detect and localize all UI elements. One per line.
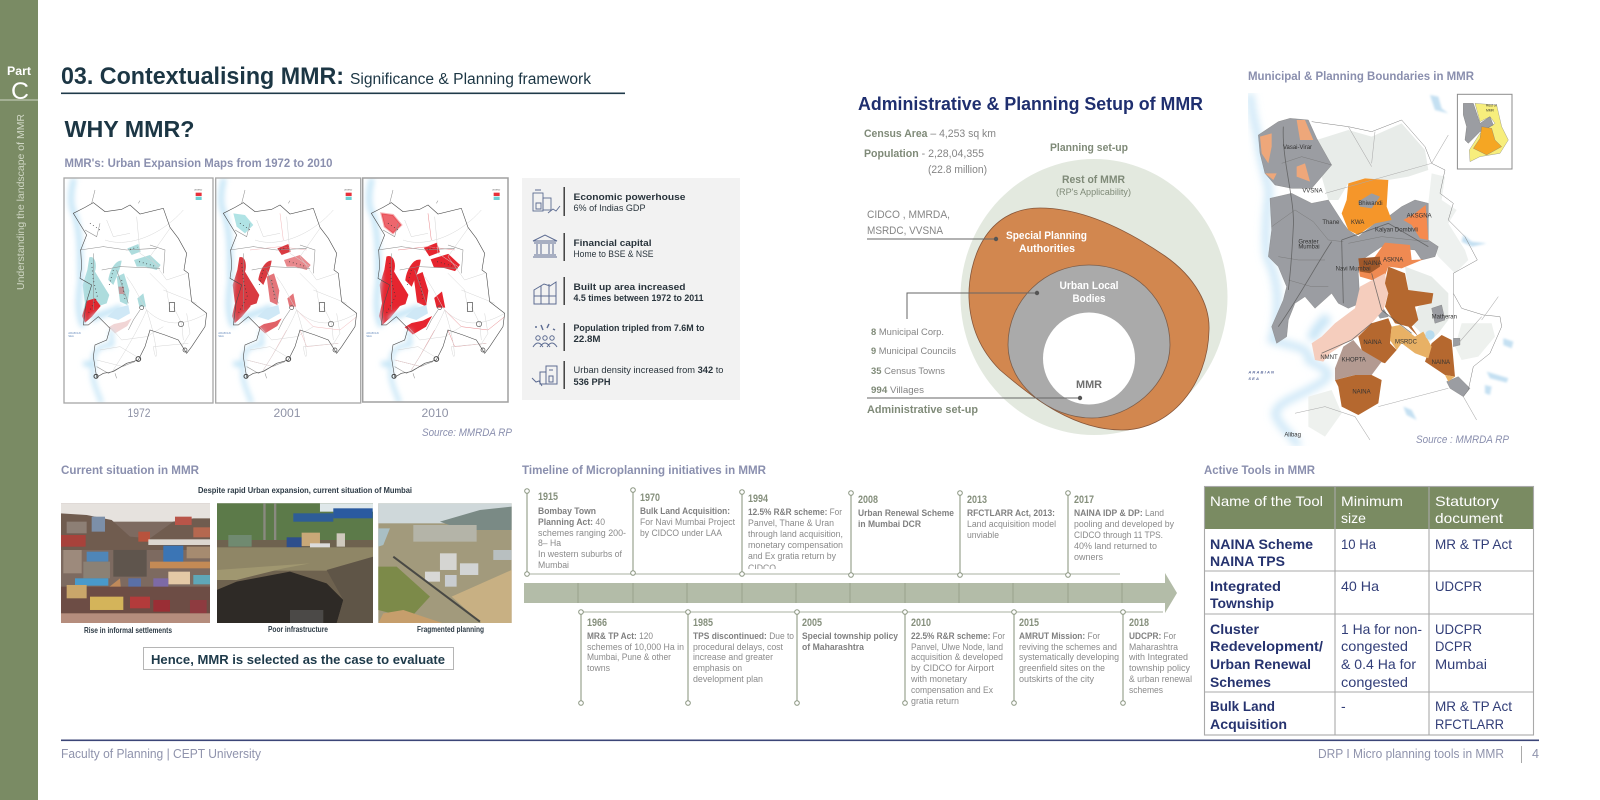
event 2018 bbox=[1128, 617, 1192, 695]
row: NAINA scheme: MR & TP Act bbox=[1435, 536, 1512, 552]
fact: built up area: 4.5 times between 1972 to 2011 bbox=[574, 293, 704, 304]
photo captions: Rise in informal settlements bbox=[84, 626, 172, 635]
row: cluster redevelopment: Urban Renewal bbox=[1210, 656, 1311, 672]
label: urban local bodies: Bodies bbox=[1072, 293, 1106, 305]
map place labels: Thane bbox=[1322, 220, 1340, 226]
row: cluster redevelopment: Redevelopment/ bbox=[1210, 638, 1323, 654]
row: integrated township: Township bbox=[1210, 595, 1274, 611]
arabian sea label: SEA bbox=[1248, 376, 1260, 381]
arabian sea label: ARABIAN bbox=[1247, 369, 1275, 374]
table header: Minimum bbox=[1341, 493, 1403, 509]
event 1966: schemes of 10,000 Ha in bbox=[587, 642, 684, 652]
page title bbox=[61, 63, 625, 94]
event 1915: 1915 bbox=[538, 491, 558, 503]
label: rest of MMR: Rest of MMR bbox=[1062, 174, 1125, 186]
map place labels bbox=[1283, 145, 1457, 439]
event 2018: with Integrated bbox=[1128, 652, 1188, 662]
event 1985: procedural delays, cost bbox=[693, 642, 783, 652]
fact: urban density: 536 PPH bbox=[574, 377, 611, 388]
event 2017: NAINA IDP & DP: Land bbox=[1074, 508, 1164, 518]
panel: urban expansion maps bbox=[64, 178, 513, 439]
row: bulk land acquisition bbox=[1210, 698, 1512, 732]
row: cluster redevelopment: & 0.4 Ha for bbox=[1341, 656, 1416, 672]
table: active tools in MMR bbox=[1204, 486, 1534, 735]
event 1966: towns bbox=[587, 663, 610, 673]
sidebar: part marker bbox=[0, 0, 38, 800]
event 2017: pooling and developed by bbox=[1074, 519, 1174, 529]
event 1915: schemes ranging 200- bbox=[538, 528, 626, 538]
label: special planning authorities: Authorities bbox=[1019, 243, 1075, 255]
row: NAINA scheme: NAINA Scheme bbox=[1210, 536, 1313, 552]
event 1985: emphasis on bbox=[693, 663, 742, 673]
label: MMR core: MMR bbox=[1076, 379, 1102, 391]
map year labels bbox=[128, 406, 449, 420]
event 2005: 2005 bbox=[802, 617, 822, 629]
text: special planning authorities list: CIDCO , MMRDA, bbox=[867, 209, 950, 221]
text: special planning authorities list: MSRDC, VVSNA bbox=[867, 225, 944, 237]
row: bulk land acquisition: Acquisition bbox=[1210, 716, 1287, 732]
text: administrative counts: 8 Municipal Corp. bbox=[871, 327, 944, 338]
event 2008: Urban Renewal Scheme bbox=[858, 508, 954, 518]
row: cluster redevelopment: congested bbox=[1341, 674, 1408, 690]
grey urban areas bbox=[1258, 118, 1470, 397]
table header: size bbox=[1341, 510, 1366, 526]
event 1994 bbox=[746, 493, 843, 573]
footer bbox=[61, 740, 1539, 763]
event 1994: and Ex gratia return by bbox=[748, 551, 836, 561]
heading: administrative setup: Administrative & Planning Setup of MMR bbox=[858, 94, 1203, 114]
row: cluster redevelopment: 1 Ha for non- bbox=[1341, 621, 1422, 637]
row: cluster redevelopment: congested bbox=[1341, 638, 1408, 654]
event 1915: Bombay Town bbox=[538, 506, 596, 516]
label: urban local bodies: Urban Local bbox=[1060, 280, 1118, 292]
page title: Significance & Planning framework bbox=[350, 71, 591, 88]
map: municipal and planning boundaries bbox=[1247, 93, 1513, 447]
text: special planning authorities list bbox=[867, 209, 950, 237]
event 2015: greenfield sites on the bbox=[1019, 663, 1105, 673]
event 1994: 1994 bbox=[748, 493, 769, 505]
table header: Statutory bbox=[1435, 493, 1499, 509]
event 2017: 40% land returned to bbox=[1074, 541, 1157, 551]
timeline arrow bbox=[524, 573, 1177, 613]
text: census area and population: Census Area – 4,253 sq km bbox=[864, 128, 996, 140]
heading: active tools: Active Tools in MMR bbox=[1204, 465, 1316, 477]
map: 2001 bbox=[216, 178, 361, 403]
photo: fragmented planning bbox=[378, 503, 512, 623]
event 1994: through land acquisition, bbox=[748, 529, 843, 539]
heading: municipal and planning boundaries: Municipal & Planning Boundaries in MMR bbox=[1248, 71, 1475, 83]
map place labels: NAINA bbox=[1363, 261, 1382, 267]
map year labels: 2010 bbox=[422, 406, 449, 420]
photo captions: Fragmented planning bbox=[417, 625, 484, 634]
fact: urban density: Urban density increased from 342 to bbox=[574, 365, 724, 376]
event 2010: acquisition & developed bbox=[911, 652, 1003, 662]
event 2018: schemes bbox=[1129, 685, 1163, 695]
event 1985: 1985 bbox=[693, 617, 713, 629]
row: cluster redevelopment: Schemes bbox=[1210, 674, 1271, 690]
subheading: urban expansion maps: MMR's: Urban Expansion Maps from 1972 to 2010 bbox=[64, 158, 332, 170]
event 2013: 2013 bbox=[967, 494, 987, 506]
text: census area and population: Population - 2,28,04,355 bbox=[864, 148, 984, 160]
row: bulk land acquisition: RFCTLARR bbox=[1435, 716, 1504, 732]
event 1994: CIDCO bbox=[748, 563, 776, 573]
event 1985: TPS discontinued: Due to bbox=[693, 631, 794, 641]
callout: MMR selected: Hence, MMR is selected as the case to evaluate bbox=[151, 652, 445, 667]
row: NAINA scheme: 10 Ha bbox=[1341, 536, 1376, 552]
rural hinterland bbox=[1308, 123, 1495, 437]
event 1970: by CIDCO under LAA bbox=[640, 528, 722, 538]
event 1915: Planning Act: 40 bbox=[538, 517, 605, 527]
row: integrated township: 40 Ha bbox=[1341, 578, 1379, 594]
event 1994: 12.5% R&R scheme: For bbox=[748, 507, 842, 517]
map place labels: Mumbai bbox=[1298, 245, 1320, 251]
map place labels: NAINA bbox=[1352, 389, 1371, 395]
event 1915 bbox=[538, 491, 626, 570]
row: bulk land acquisition: - bbox=[1341, 698, 1346, 714]
event 2010 bbox=[910, 617, 1005, 706]
row: integrated township: UDCPR bbox=[1435, 578, 1482, 594]
event 1966: Mumbai, Pune & other bbox=[587, 652, 671, 662]
fact: built up area bbox=[534, 277, 704, 305]
map place labels: Vasai-Virar bbox=[1283, 145, 1312, 151]
event 1966: 1966 bbox=[587, 617, 607, 629]
map place labels: VVSNA bbox=[1302, 188, 1323, 194]
row: integrated township bbox=[1210, 578, 1482, 611]
heading: current situation: Current situation in MMR bbox=[61, 465, 200, 477]
event 2018: 2018 bbox=[1129, 617, 1149, 629]
map: 1972 bbox=[64, 178, 213, 403]
map place labels: Matheran bbox=[1432, 315, 1457, 321]
event 2010: by CIDCO for Airport bbox=[911, 663, 994, 673]
leader lines bbox=[867, 239, 1080, 398]
event 2015: 2015 bbox=[1019, 617, 1039, 629]
event 2018: Maharashtra bbox=[1129, 642, 1178, 652]
timeline chart bbox=[524, 488, 1192, 706]
event 2010: 22.5% R&R scheme: For bbox=[911, 631, 1005, 641]
label: special planning authorities bbox=[1006, 230, 1087, 255]
label: rest of MMR bbox=[1056, 174, 1131, 197]
fact: built up area: Built up area increased bbox=[574, 282, 686, 293]
label: rest of MMR: (RP's Applicability) bbox=[1056, 187, 1131, 197]
event 2013 bbox=[967, 494, 1056, 540]
arabian sea label bbox=[1248, 371, 1274, 380]
table header: document bbox=[1435, 510, 1503, 526]
planning authority zones bbox=[1342, 178, 1392, 235]
row: NAINA scheme: NAINA TPS bbox=[1210, 553, 1285, 569]
row: bulk land acquisition: Bulk Land bbox=[1210, 698, 1275, 714]
map source: Source : MMRDA RP bbox=[1416, 434, 1510, 446]
row: cluster redevelopment: Cluster bbox=[1210, 621, 1260, 637]
light orange VVSNA patches bbox=[1260, 120, 1313, 182]
text: administrative counts: 9 Municipal Councils bbox=[871, 346, 956, 357]
photo captions: Poor infrastructure bbox=[268, 625, 328, 634]
event 2015: reviving the schemes and bbox=[1019, 642, 1117, 652]
sidebar letter: C: C bbox=[11, 78, 29, 105]
event 1985: development plan bbox=[693, 674, 763, 684]
event 2018: township policy bbox=[1129, 663, 1190, 673]
map place labels: NMNT bbox=[1320, 355, 1338, 361]
event 2008: 2008 bbox=[858, 494, 878, 506]
map place labels: MSRDC bbox=[1395, 339, 1418, 345]
event 1994: monetary compensation bbox=[748, 540, 843, 550]
event 2008 bbox=[858, 494, 954, 529]
text: census area and population bbox=[864, 128, 996, 176]
label: planning set-up: Planning set-up bbox=[1050, 142, 1128, 154]
event 1994: Panvel, Thane & Uran bbox=[748, 518, 834, 528]
event 2017 bbox=[1074, 494, 1174, 562]
event 1985: increase and greater bbox=[693, 652, 773, 662]
event 2018: UDCPR: For bbox=[1129, 631, 1176, 641]
event 1915: 8– Ha bbox=[538, 538, 561, 548]
panel: key facts bbox=[522, 178, 740, 400]
row: integrated township: Integrated bbox=[1210, 578, 1281, 594]
event 2013: Land acquisition model bbox=[967, 519, 1056, 529]
fact: financial capital bbox=[533, 233, 654, 261]
event 2005: of Maharashtra bbox=[802, 642, 865, 652]
map place labels: ASKNA bbox=[1383, 258, 1403, 264]
map place labels: Kalyan Dombivli bbox=[1375, 228, 1418, 234]
event 2015 bbox=[1019, 617, 1119, 684]
map year labels: 2001 bbox=[274, 406, 301, 420]
map inset bbox=[1457, 94, 1512, 169]
map inset: MMR bbox=[1486, 109, 1495, 113]
footer: 4 bbox=[1532, 747, 1539, 761]
map place labels: AKSGNA bbox=[1407, 214, 1432, 220]
event 2005: Special township policy bbox=[802, 631, 898, 641]
event 2010: Panvel, Ulwe Node, land bbox=[911, 642, 1003, 652]
photo: informal settlements bbox=[61, 503, 211, 624]
lakes bbox=[1403, 95, 1513, 420]
row: bulk land acquisition: MR & TP Act bbox=[1435, 698, 1512, 714]
event 2005 bbox=[802, 617, 898, 652]
event 1970: For Navi Mumbai Project bbox=[640, 517, 735, 527]
event 1966: MR& TP Act: 120 bbox=[587, 631, 653, 641]
event 2010: gratia return bbox=[911, 696, 959, 706]
water along the coast bbox=[1250, 93, 1328, 447]
text: administrative counts: 35 Census Towns bbox=[871, 366, 945, 377]
map place labels: KWA bbox=[1351, 220, 1364, 226]
fact: economic powerhouse: 6% of Indias GDP bbox=[574, 203, 646, 214]
event 1970 bbox=[640, 492, 735, 538]
event 1915: In western suburbs of bbox=[538, 549, 622, 559]
event 2013: unviable bbox=[967, 530, 999, 540]
boundaries and roads bbox=[1272, 120, 1502, 397]
map inset: Rest of bbox=[1486, 104, 1497, 108]
caption: despite rapid expansion: Despite rapid Urban expansion, current situation of Mumbai bbox=[198, 485, 412, 495]
label: urban local bodies bbox=[1060, 280, 1118, 305]
row: cluster redevelopment: UDCPR bbox=[1435, 621, 1482, 637]
text: administrative counts bbox=[871, 327, 956, 396]
event 2017: owners bbox=[1074, 552, 1103, 562]
photo captions bbox=[84, 625, 484, 635]
event 2010: with monetary bbox=[910, 674, 967, 684]
footer: DRP I Micro planning tools in MMR bbox=[1318, 747, 1504, 761]
map place labels: NAINA bbox=[1432, 360, 1450, 366]
fact: financial capital: Financial capital bbox=[574, 238, 652, 249]
page title: 03. Contextualising MMR: bbox=[61, 63, 344, 90]
nested diagram: planning and administrative setup bbox=[867, 159, 1228, 435]
label: administrative set-up: Administrative set-up bbox=[867, 404, 978, 416]
footer: Faculty of Planning | CEPT University bbox=[61, 747, 262, 761]
event 2017: CIDCO through 11 TPS. bbox=[1074, 530, 1163, 540]
event 2015: outskirts of the city bbox=[1019, 674, 1094, 684]
label: special planning authorities: Special Planning bbox=[1006, 230, 1087, 242]
row: cluster redevelopment bbox=[1210, 621, 1487, 690]
table header bbox=[1204, 486, 1534, 529]
timeline connectors bbox=[527, 574, 1163, 612]
heading: why MMR: WHY MMR? bbox=[64, 116, 194, 142]
sidebar label: Part: Part bbox=[7, 64, 31, 78]
fact: financial capital: Home to BSE & NSE bbox=[574, 249, 654, 260]
event 2018: & urban renewal bbox=[1129, 674, 1192, 684]
row: NAINA scheme bbox=[1210, 536, 1512, 569]
event 2008: in Mumbai DCR bbox=[858, 519, 921, 529]
event 2013: RFCTLARR Act, 2013: bbox=[967, 508, 1055, 518]
event 2010: 2010 bbox=[911, 617, 931, 629]
heading: timeline: Timeline of Microplanning initiatives in MMR bbox=[522, 465, 767, 477]
event 1966 bbox=[587, 617, 684, 673]
fact: economic powerhouse: Economic powerhouse bbox=[574, 192, 686, 203]
photo: poor infrastructure bbox=[217, 503, 373, 625]
map place labels: Navi Mumbai bbox=[1336, 267, 1371, 273]
event 1970: 1970 bbox=[640, 492, 660, 504]
callout: MMR selected bbox=[144, 648, 454, 670]
map place labels: Bhiwandi bbox=[1358, 201, 1383, 207]
event 2015: systematically developing bbox=[1019, 652, 1119, 662]
event 2010: compensation and Ex bbox=[911, 685, 993, 695]
event 1970: Bulk Land Acquisition: bbox=[640, 506, 730, 516]
text: census area and population: (22.8 million) bbox=[928, 164, 987, 176]
fact: economic powerhouse bbox=[533, 187, 686, 216]
event 1915: Mumbai bbox=[538, 560, 569, 570]
map place labels: NAINA bbox=[1363, 340, 1382, 346]
map place labels: Alibag bbox=[1284, 433, 1301, 439]
table header: Name of the Tool bbox=[1210, 493, 1323, 509]
event 1985 bbox=[693, 617, 794, 684]
row: cluster redevelopment: Mumbai bbox=[1435, 656, 1487, 672]
map: 2010 bbox=[363, 178, 508, 403]
fact: urban density bbox=[532, 361, 724, 389]
event 2017: 2017 bbox=[1074, 494, 1094, 506]
event 2015: AMRUT Mission: For bbox=[1019, 631, 1100, 641]
map place labels: KHOPTA bbox=[1342, 358, 1366, 364]
fact: population: Population tripled from 7.6M to bbox=[574, 323, 705, 334]
map place labels: Greater bbox=[1298, 239, 1319, 245]
row: cluster redevelopment: DCPR bbox=[1435, 638, 1472, 654]
text: administrative counts: 994 Villages bbox=[871, 385, 924, 396]
sidebar vertical caption: Understanding the landscape of MMR bbox=[15, 114, 27, 290]
fact: population bbox=[533, 323, 705, 351]
map year labels: 1972 bbox=[128, 406, 151, 420]
fact: population: 22.8M bbox=[574, 334, 601, 345]
map source: Source: MMRDA RP bbox=[422, 427, 513, 439]
